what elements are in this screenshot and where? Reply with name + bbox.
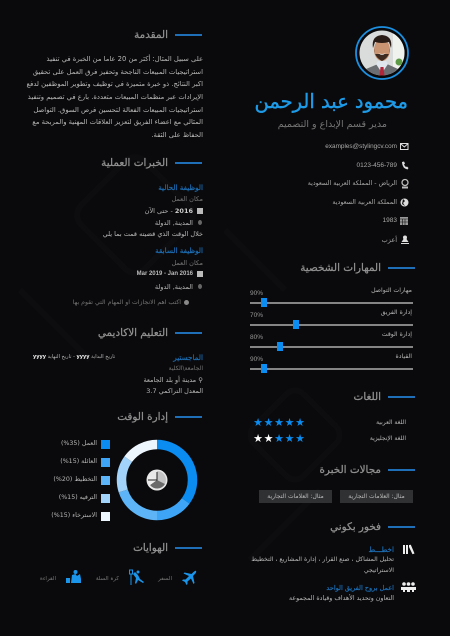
language ratings: اللغة العربية [376,419,406,426]
contact list [308,143,409,244]
legend: time management: الترفيه (%15) [59,494,97,501]
legend: time management [51,440,110,521]
achievement: planning: الاستراتيجي [364,567,394,574]
heading: experience: الخبرات العملية [101,157,168,169]
expertise tag [259,490,332,503]
education [33,353,203,395]
legend: time management: العائلة (%15) [60,458,97,465]
language ratings: ★ [253,432,263,445]
skills chart: مهارات التواصل [371,287,412,294]
education: الجامعة\الكلية [169,365,203,372]
intro paragraph: على سبيل المثال: أكثر من 20 عاما من الخبرة في تنفيذ [47,55,203,63]
language ratings: ★ [285,432,294,445]
donut chart [116,440,198,520]
hobbies [40,570,196,585]
language ratings: ★ [285,416,294,429]
work experience: الوظيفة الحالية [158,183,203,192]
legend: time management: التخطيط (%20) [53,476,97,483]
skills chart: القيادة [396,353,412,360]
skills chart: 70% [250,312,263,319]
education: تاريخ البداية yyyy - تاريخ النهاية yyyy [33,354,115,360]
education: ⚲ مدينة أو بلد الجامعة [143,376,203,384]
hobbies: القراءة [40,576,56,582]
achievement: planning: تحليل المشاكل ، صنع القرار ، إدارة المشاريع ، التخطيط [251,556,394,563]
heading: time management: إدارة الوقت [117,411,168,423]
contact list: examples@stylingcv.com [325,143,397,150]
icon: plane [182,570,196,585]
intro paragraph: استراتيجيات المبيعات الناجحة وتحفيز فرق العمل على تحقيق [33,68,203,76]
work experience: المدينة, الدولة [155,219,193,227]
icon: reading [66,570,81,583]
contact list: الرياض - المملكة العربية السعودية [308,180,397,187]
skills chart: 90% [250,290,263,297]
heading: skills: المهارات الشخصية [300,262,381,274]
skills chart: 80% [250,334,263,341]
icon: pie chart [146,470,168,490]
heading: hobbies: الهوايات [133,542,168,554]
expertise tag: مثال: العلامات التجارية [267,493,324,500]
legend: time management: الاسترخاء (%15) [51,512,97,519]
contact list: المملكة العربية السعودية [332,199,397,206]
intro paragraph: استراتيجيات المبيعات الفعالة لتحسين فرص السوق. التواصل [33,106,203,114]
work experience: 2016 - حتى الآن [145,207,193,215]
work experience [73,183,203,306]
achievement: team: التعاون وتحديد الأهداف وقيادة المجموعة [289,595,394,602]
name: محمود عبد الرحمن [254,90,408,113]
work experience: Mar 2019 - Jan 2016 [137,271,193,277]
language ratings: ★ [264,432,273,445]
language ratings: اللغة الإنجليزية [370,435,406,442]
work experience: المدينة, الدولة [155,283,193,291]
work experience: خلال الوقت الذي قضيته قمت بما يلي [103,230,203,238]
language ratings: ★ [274,432,284,445]
work experience: مكان العمل [172,195,203,203]
work experience: اكتب اهم الانجازات او المهام التي تقوم بها [73,299,181,306]
legend: time management: العمل (%35) [61,440,97,447]
language ratings: ★ [295,416,305,429]
work experience: مكان العمل [172,259,203,267]
job title: مدير قسم الإبداع و التصميم [278,119,387,130]
achievement: team [289,582,416,602]
intro paragraph [26,54,203,138]
language ratings [253,416,406,445]
heading: education: التعليم الاكاديمي [98,327,168,339]
heading: expertise: مجالات الخبرة [319,464,381,476]
work experience: الوظيفة السابقة [155,246,203,255]
expertise tag: مثال: العلامات التجارية [348,493,405,500]
contact list: أعزب [382,236,397,244]
icon: basketball [129,570,144,585]
hobbies: كرة السلة [96,576,119,582]
skills chart: إدارة الفريق [381,309,412,316]
heading: languages: اللغات [354,391,381,403]
intro paragraph: اكبر النتائج. ذو خبرة متميزة في توظيف وتطوير الموظفين لدفع [26,80,203,88]
profile photo [355,26,409,80]
contact list: 0123-456-789 [357,162,397,169]
language ratings: ★ [295,432,305,445]
expertise tag [340,490,413,503]
heading: intro: المقدمة [134,29,168,41]
education: الماجستير [173,353,203,362]
intro paragraph: المثالي مع اعضاء الفريق لتعزيز العلاقات المهنية والمربحة مع [32,118,203,126]
education: المعدل التراكمي 3.7 [146,387,203,395]
achievement: planning [251,544,414,574]
language ratings: ★ [274,416,284,429]
skills chart: إدارة الوقت [382,331,412,338]
heading: proud of: فخور بكوني [330,521,381,533]
intro paragraph: الإيرادات عبر منظمات المبيعات متعددة. بارع في تصميم وتنفيذ [28,93,203,101]
achievement: planning: اخطـــط [369,545,394,554]
skills chart [250,287,413,373]
hobbies: السفر [158,576,172,582]
intro paragraph: الحفاظ على الثقة. [151,130,203,138]
skills chart: 90% [250,356,263,363]
achievement: team: اعمل بروح الفريق الواحد [326,584,394,592]
language ratings: ★ [253,416,263,429]
contact list: 1983 [383,217,397,224]
language ratings: ★ [264,416,273,429]
